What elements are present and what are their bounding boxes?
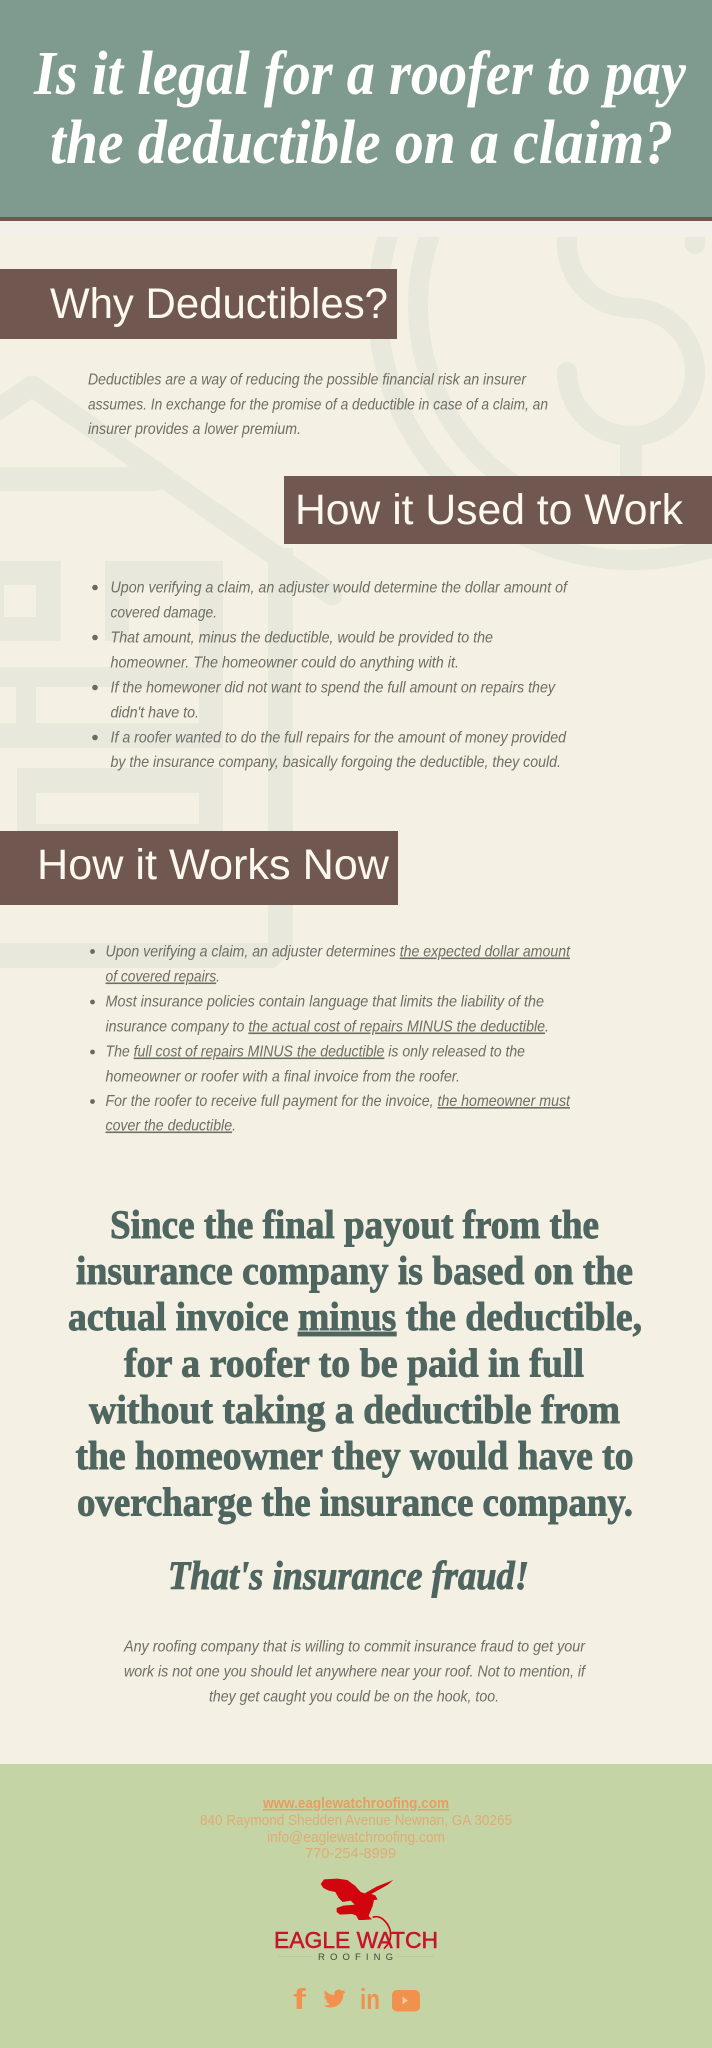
- bullet list: how it used to work: If a roofer wanted to do the full repairs for the amount of money provided: [110, 730, 567, 746]
- bullet list: how it works now: Most insurance policies contain language that limits the liability of the: [106, 994, 544, 1010]
- heading: How it Used to Work: How it Used to Work: [295, 486, 683, 534]
- closing paragraph: work is not one you should let anywhere near your roof. Not to mention, if: [124, 1664, 586, 1680]
- large statement: overcharge the insurance company.: [77, 1480, 633, 1524]
- icon: youtube: [392, 1990, 420, 2012]
- large statement: without taking a deductible from: [89, 1387, 620, 1432]
- closing paragraph: [123, 1638, 586, 1706]
- icon: linkedin: in: [360, 1984, 380, 2016]
- heading: Why Deductibles?: [0, 269, 397, 339]
- contact details: www.eaglewatchroofing.com: [262, 1795, 449, 1812]
- bullet list: how it used to work: by the insurance company, basically forgoing the deductible, they could.: [110, 754, 561, 771]
- contact details: 840 Raymond Shedden Avenue Newnan, GA 30265: [200, 1812, 512, 1829]
- bullet list: how it works now: of covered repairs.: [106, 968, 220, 986]
- large statement: for a roofer to be paid in full: [124, 1340, 584, 1386]
- bullet list: how it used to work: didn't have to.: [110, 704, 199, 722]
- bullet list: how it used to work: [92, 580, 568, 771]
- large statement: actual invoice minus the deductible,: [68, 1294, 642, 1339]
- bullet list: how it works now: cover the deductible.: [106, 1118, 236, 1134]
- icon: twitter: [324, 1990, 346, 2008]
- bullet list: how it works now: [90, 944, 570, 1134]
- header band: [0, 0, 712, 221]
- contact details: info@eaglewatchroofing.com: [267, 1829, 445, 1846]
- bullet list: how it works now: The full cost of repairs MINUS the deductible is only released to the: [106, 1044, 525, 1060]
- icon: facebook: f: [293, 1984, 306, 2016]
- contact details: [200, 1795, 512, 1862]
- title: the deductible on a claim?: [50, 109, 673, 177]
- heading: How it Works Now: [0, 831, 398, 905]
- paragraph: why deductibles: Deductibles are a way of reducing the possible financial risk an insurer: [88, 372, 527, 388]
- large statement: the homeowner they would have to: [76, 1433, 634, 1478]
- icon: eagle: [321, 1879, 393, 1949]
- bullet list: how it works now: insurance company to the actual cost of repairs MINUS the deductible.: [106, 1018, 549, 1036]
- bullet list: how it works now: Upon verifying a claim, an adjuster determines the expected dollar amount: [106, 944, 570, 960]
- bullet list: how it works now: homeowner or roofer with a final invoice from the roofer.: [106, 1068, 460, 1086]
- closing paragraph: Any roofing company that is willing to commit insurance fraud to get your: [123, 1638, 586, 1656]
- social icons: [293, 1984, 420, 2016]
- paragraph: why deductibles: assumes. In exchange for the promise of a deductible in case of a claim, an: [88, 396, 548, 414]
- large statement: Since the final payout from the: [110, 1202, 599, 1247]
- background watermark: house and dollar coin: [0, 237, 712, 968]
- large statement: insurance company is based on the: [76, 1248, 633, 1293]
- closing paragraph: they get caught you could be on the hook, too.: [209, 1688, 499, 1706]
- logo: Eagle Watch Roofing: ROOFING: [318, 1952, 393, 1963]
- paragraph: why deductibles: insurer provides a lower premium.: [88, 421, 301, 438]
- paragraph: why deductibles: [88, 372, 548, 438]
- heading: Why Deductibles?: Why Deductibles?: [50, 280, 388, 328]
- footer panel: [0, 1764, 712, 2048]
- bullet list: how it used to work: homeowner. The homeowner could do anything with it.: [110, 654, 459, 672]
- logo: Eagle Watch Roofing: [274, 1879, 438, 1963]
- large statement: [68, 1202, 642, 1524]
- heading: How it Used to Work: [284, 476, 712, 544]
- title: [33, 40, 686, 177]
- callout: That's insurance fraud!: That's insurance fraud!: [168, 1553, 529, 1598]
- contact details: 770-254-8999: [305, 1845, 396, 1862]
- bullet list: how it used to work: If the homewoner did not want to spend the full amount on repairs they: [110, 680, 556, 696]
- bullet list: how it used to work: Upon verifying a claim, an adjuster would determine the dollar amount of: [110, 580, 568, 596]
- logo: Eagle Watch Roofing: EAGLE WATCH: [274, 1927, 438, 1953]
- bullet list: how it used to work: covered damage.: [110, 604, 217, 622]
- heading: How it Works Now: How it Works Now: [37, 841, 390, 889]
- bullet list: how it works now: For the roofer to receive full payment for the invoice, the homeowner must: [106, 1093, 570, 1110]
- bullet list: how it used to work: That amount, minus the deductible, would be provided to the: [110, 630, 493, 646]
